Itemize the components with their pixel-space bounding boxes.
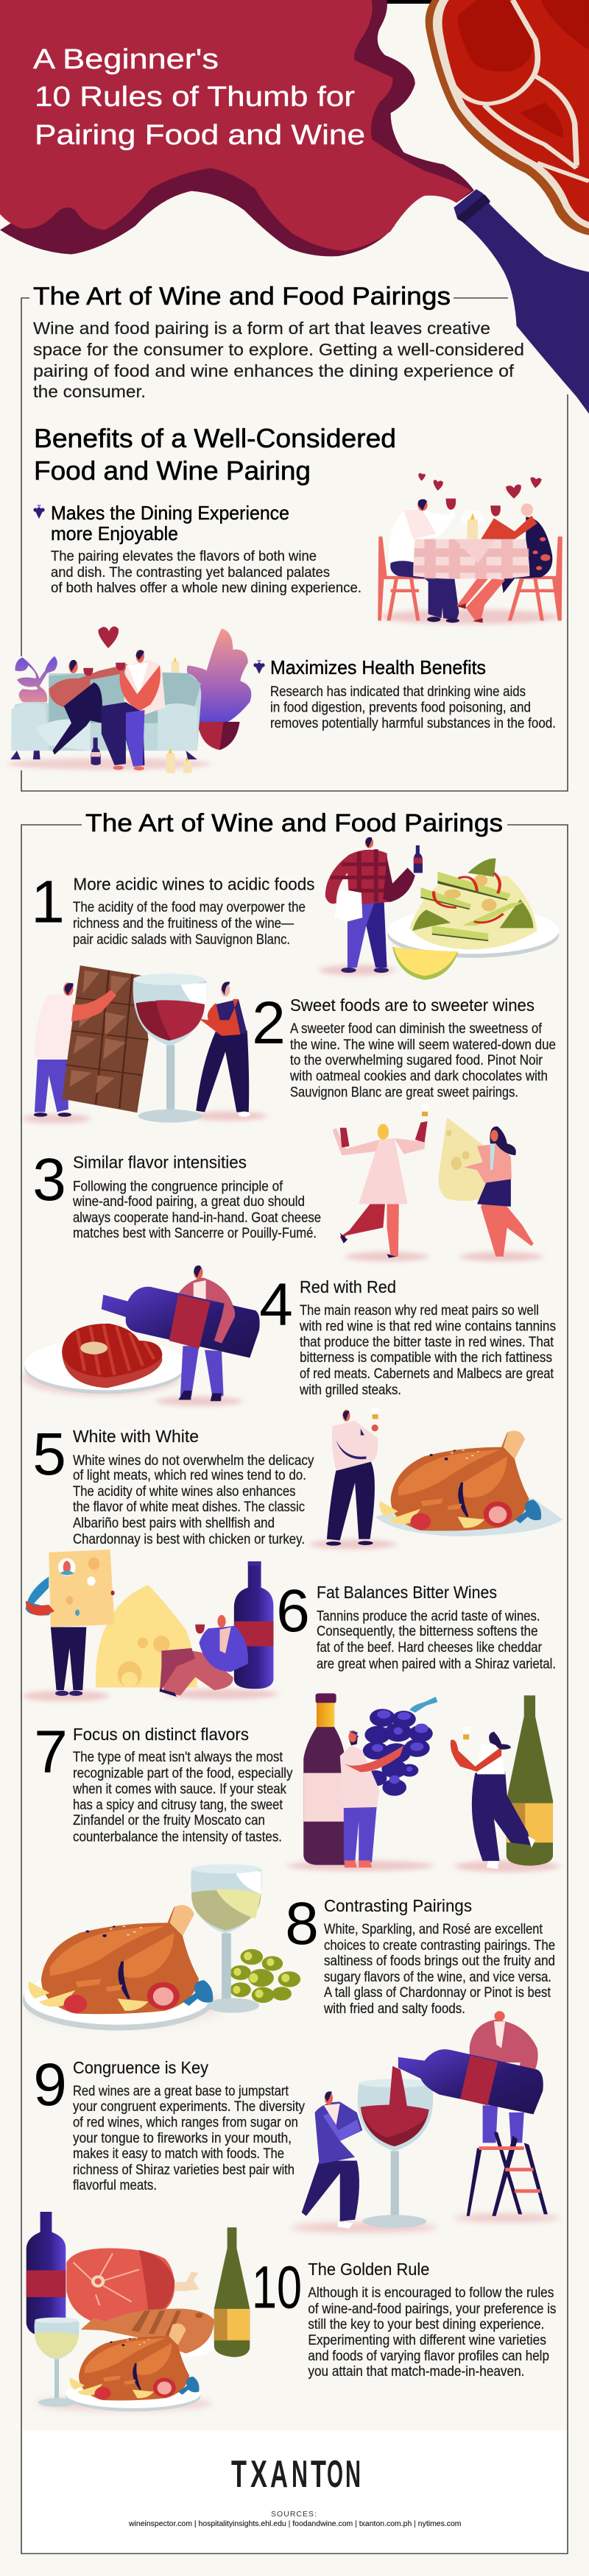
wine glasses: [446, 498, 501, 517]
panel: the art of wine and food pairings intro: [21, 283, 568, 791]
man arm: [214, 1299, 235, 1344]
rule 9 text: flavorful meats.: [73, 2178, 157, 2193]
illustration: couple dining at table: [378, 473, 562, 624]
illustration 4: man with bottle and steak: [23, 1266, 260, 1406]
heading: The Art of Wine and Food Pairings: [85, 809, 503, 837]
rule 9 text: [33, 2051, 305, 2193]
wine splash: [0, 0, 474, 256]
illustration 9: pouring wine into giant glass: [291, 2011, 560, 2232]
rule 8 text: White, Sparkling, and Rosé are excellent: [324, 1922, 543, 1937]
rule 7 text: counterbalance the intensity of tastes.: [73, 1829, 282, 1845]
rule 4 text: with red wine is that red wine contains tannins: [299, 1319, 556, 1335]
rule 6 text: Consequently, the bitterness softens the: [317, 1624, 537, 1639]
rule 8 text: [285, 1890, 555, 2017]
steak: [62, 1324, 162, 1388]
lemon: [392, 947, 458, 980]
person right: [196, 1031, 249, 1112]
cheese wedge: [96, 1585, 197, 1687]
person left: [35, 1060, 68, 1112]
man with grapes: [344, 1806, 377, 1862]
waiter: [348, 899, 387, 968]
plate: [24, 1341, 186, 1394]
rule 7 text: 7: [34, 1719, 68, 1786]
left plant: [15, 656, 57, 702]
illustration 3: women with cheese: [333, 1104, 543, 1261]
green grapes: [230, 1949, 300, 2003]
rule 2 text: 2: [252, 990, 286, 1057]
header illustration: wine splash, bottle and steak: [0, 0, 589, 414]
illustration 1: waiter with salad: [320, 837, 559, 980]
rule 2 text: Sweet foods are to sweeter wines: [290, 996, 535, 1015]
panel frame: [21, 298, 568, 791]
wine glass: [166, 1045, 174, 1110]
rule 10 text: still the key to your best dining experience.: [308, 2317, 544, 2332]
ham: [174, 2271, 199, 2291]
rule 2 text: A sweeter food can diminish the sweetness of: [290, 1021, 543, 1037]
rule 5 text: White wines do not overwhelm the delicacy: [73, 1453, 314, 1469]
rule 10 text: you attain that match-made-in-heaven.: [308, 2364, 524, 2380]
benefit one text: The pairing elevates the flavors of both wine: [51, 549, 317, 564]
brand logo: T: [231, 2453, 247, 2496]
wine bottle and candles: [91, 737, 101, 765]
benefit one text: and dish. The contrasting yet balanced palates: [51, 565, 330, 581]
salad: [409, 876, 537, 949]
icon: wine bottle: [454, 189, 589, 414]
benefit one heading: [51, 502, 289, 544]
man on sofa: [124, 660, 165, 715]
brand logo: X: [250, 2453, 267, 2496]
intro paragraph: pairing of food and wine enhances the dining experience of: [33, 361, 515, 380]
benefit one heading: more Enjoyable: [51, 522, 178, 544]
person holding cheese slab: [51, 1627, 86, 1690]
white wine glass: [191, 1864, 262, 2013]
rule 10 text: 10: [252, 2254, 302, 2321]
rule 8 text: choices to create contrasting pairings. The: [324, 1938, 555, 1954]
rule 10 text: Experimenting with different wine varieties: [308, 2333, 546, 2349]
icon: steak: [426, 0, 589, 235]
heading: The Art of Wine and Food Pairings: [33, 283, 451, 311]
rule 9 text: richness of Shiraz varieties best pair with: [73, 2162, 294, 2178]
small wine glass: [54, 2359, 59, 2400]
table cloth: [413, 539, 529, 579]
intro paragraph: [33, 319, 524, 401]
roast chicken: [379, 1431, 541, 1531]
rule 9 text: your tongue to fireworks in your mouth,: [73, 2131, 292, 2146]
woman: [472, 1772, 532, 1861]
rule 9 text: your congruent experiments. The diversity: [73, 2099, 305, 2115]
rule 4 text: The main reason why red meat pairs so well: [300, 1303, 539, 1319]
purple bottle: [27, 2212, 66, 2334]
rule 2 text: the wine. The wine will seem watered-down due: [290, 1037, 556, 1053]
illustration 7: man with grapes and woman with bottle: [287, 1693, 560, 1872]
grapes: [363, 1709, 433, 1796]
rule 5 text: of light meats, which red wines tend to do.: [73, 1468, 306, 1483]
rule 7 text: [34, 1719, 293, 1845]
rule 10 text: and foods of varying flavor profiles can help: [308, 2349, 549, 2364]
brand logo: T: [311, 2453, 326, 2496]
rule 9 text: Congruence is Key: [73, 2058, 208, 2077]
brand logo: N: [292, 2453, 308, 2496]
candle: [462, 511, 484, 526]
rule 1 text: The acidity of the food may overpower the: [73, 900, 306, 915]
rule 3 text: 3: [32, 1146, 66, 1213]
heading: benefits: Food and Wine Pairing: [34, 455, 311, 486]
rule 8 text: saltiness of foods brings out the fruity and: [324, 1954, 555, 1969]
rule 1 text: More acidic wines to acidic foods: [74, 875, 315, 894]
illustration 2: chocolate bar and red wine: [23, 965, 267, 1124]
rule 4 text: that produce the bitter taste in red wines. That: [300, 1335, 554, 1350]
title: 10 Rules of Thumb for: [35, 82, 355, 113]
rule 4 text: Red with Red: [300, 1277, 396, 1296]
chairs: [378, 536, 562, 621]
rule 3 text: wine-and-food pairing, a great duo should: [72, 1194, 305, 1210]
rule 10 text: The Golden Rule: [308, 2260, 429, 2279]
rule 2 text: to the overwhelming sugared food. Pinot Noir: [290, 1053, 543, 1068]
title: [33, 44, 365, 151]
rule 1 text: [31, 869, 315, 948]
illustration 8: chicken, white wine and green grapes: [23, 1864, 300, 2031]
woman with glass: [387, 1204, 399, 1257]
brand logo: O: [327, 2453, 343, 2496]
illustration 5: man with roast chicken: [310, 1408, 562, 1549]
plate: [388, 912, 559, 958]
intro paragraph: space for the consumer to explore. Getting a well-considered: [33, 340, 524, 359]
rule 8 text: 8: [285, 1890, 319, 1957]
rule 1 text: 1: [31, 869, 65, 936]
rule 9 text: Red wines are a great base to jumpstart: [73, 2084, 289, 2099]
rule 9 text: 9: [33, 2051, 67, 2118]
green bottle: [507, 1695, 553, 1866]
rule 7 text: Zinfandel or the fruity Moscato can: [73, 1813, 265, 1828]
panel frame: [21, 825, 568, 2553]
benefit two text: Research has indicated that drinking wine aids: [270, 684, 526, 700]
rule 7 text: Focus on distinct flavors: [73, 1725, 249, 1744]
rule 1 text: pair acidic salads with Sauvignon Blanc.: [73, 932, 290, 948]
rule 7 text: when it comes with sauce. If your steak: [72, 1782, 286, 1797]
flower pot: [197, 722, 240, 750]
brand logo: N: [345, 2453, 361, 2496]
rule 7 text: has a spicy and citrusy tang, the sweet: [73, 1798, 283, 1813]
rule 10 text: [252, 2254, 556, 2380]
fish: [152, 2335, 216, 2357]
rule 6 text: are great when paired with a Shiraz varietal.: [317, 1657, 556, 1672]
rule 3 text: always cooperate hand-in-hand. Goat cheese: [73, 1210, 321, 1226]
rule 4 text: 4: [259, 1271, 293, 1338]
heading: benefits: Benefits of a Well-Considered: [34, 423, 396, 453]
rule 5 text: White with White: [73, 1427, 199, 1446]
rule 7 text: The type of meat isn't always the most: [73, 1750, 283, 1765]
icon: grapes bullet two: [253, 660, 265, 674]
tilted wine bottle: [102, 1287, 260, 1358]
rule 6 text: Tannins produce the acrid taste of wines.: [317, 1608, 540, 1625]
woman with cheese: [481, 1193, 533, 1257]
rule 2 text: [252, 990, 556, 1101]
woman on sofa: [49, 664, 127, 707]
rule 2 text: Sauvignon Blanc are great sweet pairings.: [290, 1085, 518, 1101]
rule 3 text: Following the congruence principle of: [73, 1179, 283, 1195]
platter: [375, 1497, 562, 1536]
plate: [23, 1968, 214, 2031]
rule 5 text: 5: [32, 1421, 66, 1488]
benefit two heading: Maximizes Health Benefits: [270, 656, 486, 678]
rule 10 text: Although it is encouraged to follow the rules: [308, 2285, 554, 2301]
heart: [98, 626, 119, 648]
sofa: [11, 673, 201, 751]
illustration 10: wine, ham, fish and chicken: [27, 2212, 250, 2411]
title: Pairing Food and Wine: [35, 120, 365, 151]
woman: [501, 517, 552, 593]
hearts: [418, 473, 542, 498]
rule 3 text: matches best with Sancerre or Pouilly-Fumé.: [73, 1226, 317, 1241]
sitting person: [163, 1650, 233, 1695]
benefit one text: [51, 549, 361, 596]
big cheese: [439, 1118, 493, 1201]
panel: ten rules: [21, 809, 568, 2553]
bottle: [234, 1561, 273, 1689]
man: [327, 1461, 375, 1541]
right plant: [187, 628, 251, 723]
rule 6 text: [276, 1578, 556, 1672]
glasses: [83, 663, 125, 676]
footer panel background: [21, 2430, 568, 2553]
man torso: [178, 1277, 235, 1335]
chocolate bar: [62, 965, 149, 1113]
benefit two text: in food digestion, prevents food poisoning, and: [270, 700, 531, 715]
ladder: [467, 2132, 548, 2216]
man legs: [180, 1346, 224, 1396]
benefit one heading: Makes the Dining Experience: [51, 502, 289, 524]
rule 5 text: [32, 1421, 314, 1547]
rule 5 text: Chardonnay is best with chicken or turkey.: [73, 1532, 305, 1547]
wine stream: [389, 2066, 408, 2113]
rule 3 text: Similar flavor intensities: [73, 1152, 247, 1171]
rule 1 text: richness and the fruitiness of the wine—: [73, 916, 294, 932]
rule 8 text: Contrasting Pairings: [324, 1896, 472, 1915]
rule 8 text: sugary flavors of the wine, and vice versa.: [324, 1970, 551, 1985]
rule 7 text: recognizable part of the food, especially: [73, 1766, 293, 1781]
icon: grapes bullet one: [33, 505, 45, 519]
rule 3 text: [32, 1146, 321, 1241]
man: [389, 505, 455, 568]
benefit two text: [270, 684, 556, 731]
rule 8 text: with fried and salty foods.: [323, 2001, 465, 2017]
tilted bottle: [398, 2049, 543, 2114]
person on ladder: [470, 2011, 538, 2143]
rule 4 text: with grilled steaks.: [299, 1383, 401, 1398]
giant glass: [391, 2151, 399, 2215]
green bottle: [214, 2227, 250, 2357]
rule 6 text: fat of the beef. Hard cheeses like cheddar: [317, 1640, 543, 1656]
rule 5 text: The acidity of white wines also enhances: [73, 1484, 296, 1500]
illustration 6: cheese and bottle: [23, 1550, 278, 1701]
rule 9 text: makes it easy to match with foods. The: [73, 2146, 284, 2162]
red wine bottle: [303, 1703, 345, 1865]
sources: SOURCES:: [271, 2510, 317, 2519]
brand logo: A: [270, 2453, 288, 2496]
rule 5 text: Albariño best pairs with shellfish and: [73, 1516, 275, 1531]
rule 6 text: Fat Balances Bitter Wines: [317, 1583, 497, 1602]
intro paragraph: the consumer.: [33, 382, 146, 401]
rule 9 text: of red wines, which ranges from sugar on: [73, 2115, 298, 2131]
rule 4 text: [259, 1271, 556, 1398]
rule 6 text: 6: [276, 1578, 310, 1644]
intro paragraph: Wine and food pairing is a form of art that leaves creative: [33, 319, 490, 338]
arm left: [71, 990, 116, 1021]
brand logo: [231, 2453, 361, 2496]
benefit two text: removes potentially harmful substances in the food.: [270, 716, 556, 731]
sources: [128, 2510, 462, 2528]
rule 4 text: of red meats. Cabernets and Malbecs are great: [300, 1366, 554, 1382]
rule 4 text: bitterness is compatible with the rich fattiness: [300, 1350, 552, 1366]
roast chicken small: [70, 2324, 200, 2400]
roast chicken: [29, 1905, 213, 2014]
rule 8 text: A tall glass of Chardonnay or Pinot is best: [324, 1985, 551, 2001]
title: A Beginner's: [33, 44, 219, 75]
illustration: couple on sofa: [7, 626, 251, 773]
benefit one text: of both halves offer a whole new dining experience.: [51, 581, 361, 596]
rule 2 text: with oatmeal cookies and dark chocolates with: [289, 1069, 548, 1085]
sources: wineinspector.com | hospitalityinsights.ehl.edu | foodandwine.com | txanton.com.ph | nytimes.com: [128, 2519, 462, 2528]
rule 5 text: the flavor of white meat dishes. The classic: [73, 1500, 305, 1515]
black strip at top: [387, 0, 434, 4]
man in plaid blazer: [302, 2161, 359, 2221]
plate: [66, 2381, 200, 2411]
rule 10 text: of wine-and-food pairings, your preference is: [308, 2302, 556, 2317]
heading: benefits: [34, 423, 396, 486]
